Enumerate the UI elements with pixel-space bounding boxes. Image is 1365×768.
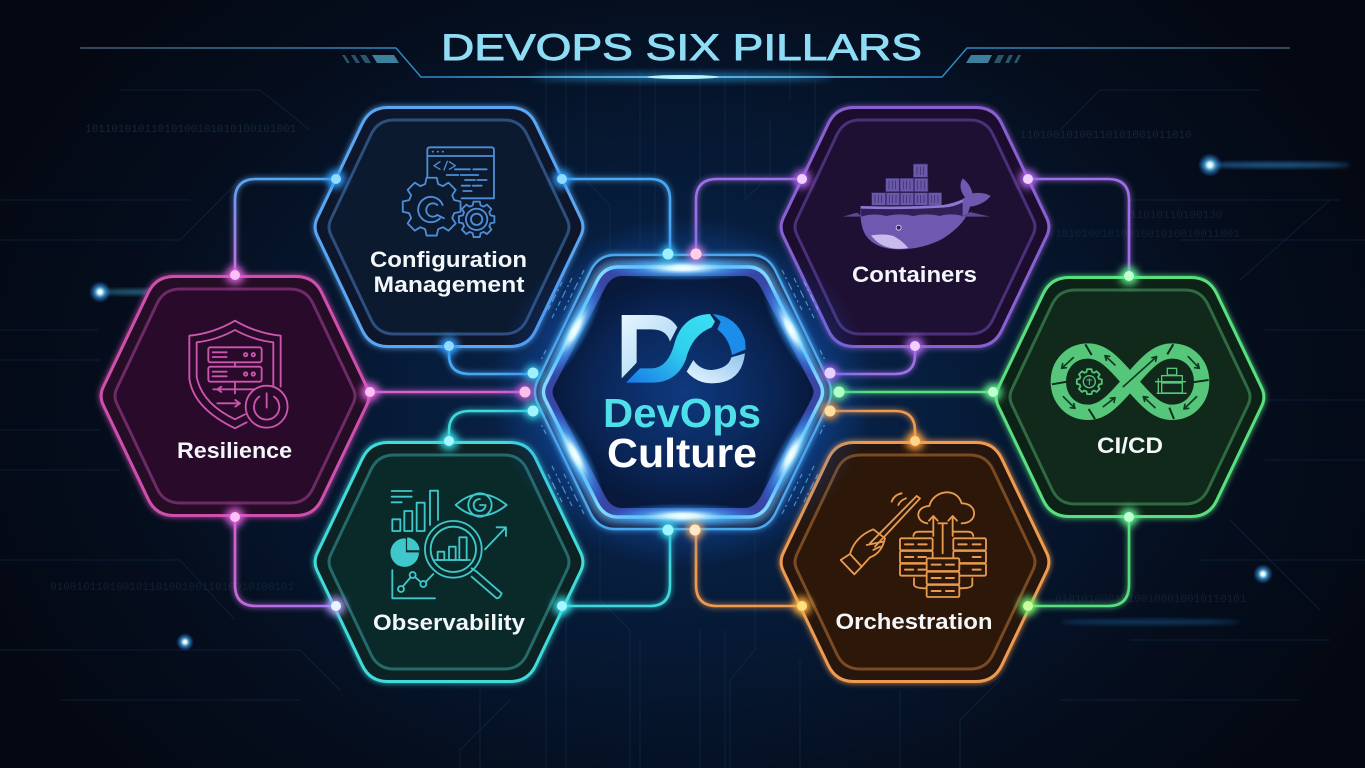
hexagon frame: Orchestration [781, 442, 1049, 682]
binary text right: 01010100010100100010010110101 [1055, 594, 1247, 606]
label: DevOps: DevOps [603, 390, 761, 436]
hexagon frame: Configuration Management [315, 108, 583, 346]
icon: DO logo [622, 314, 746, 383]
icon: code window and gears [403, 147, 494, 237]
label: Containers: Containers [852, 262, 977, 287]
binary text right: 11010110100130 [1130, 210, 1222, 222]
binary text left [50, 124, 297, 594]
title frame [80, 48, 1290, 80]
label: Observability: Observability [373, 610, 526, 635]
icon: conductor hand, cloud and servers [841, 492, 986, 597]
hexagon frame: Observability [315, 442, 583, 682]
icon: docker whale [843, 164, 991, 249]
panel: Resilience [101, 276, 369, 516]
center ambient glow [493, 217, 873, 567]
label: Configuration Management [370, 247, 527, 297]
binary text left: 0100101101001011010010011010010100101 [50, 582, 295, 594]
binary text left: 10110101011010100101010100101001 [85, 124, 297, 136]
binary text right: 11010010100110101001011010 [1020, 130, 1192, 142]
label: Orchestration: Orchestration [836, 609, 992, 634]
glowing background light points [89, 153, 1350, 651]
label: Configuration Management: Configuration [370, 247, 527, 272]
icon: shield with server and power [189, 321, 288, 428]
icon: analytics and magnifier [391, 491, 507, 598]
binary text right [1020, 130, 1247, 606]
center data streaks [540, 270, 826, 514]
title: DEVOPS SIX PILLARS [441, 27, 922, 68]
center hexagon light flares [537, 255, 829, 529]
label: Culture: Culture [607, 430, 757, 476]
connector nodes [226, 170, 1138, 615]
panel: Containers [781, 108, 1049, 346]
connector lines [235, 179, 1129, 606]
panel: DevOps Culture center [493, 217, 873, 567]
panel: Configuration Management [315, 108, 583, 346]
panel: CI/CD [996, 278, 1264, 516]
label: CI/CD: CI/CD [1097, 433, 1163, 458]
panel: Observability [315, 442, 583, 682]
center hexagon frame [535, 255, 831, 529]
hexagon frame: Containers [781, 108, 1049, 346]
icon: infinity loop [1052, 344, 1209, 419]
label: Resilience: Resilience [177, 438, 292, 463]
panel: Orchestration [781, 442, 1049, 682]
label: Configuration Management: Management [374, 272, 525, 297]
binary text right: 1010100101001001010010011001 [1055, 229, 1240, 241]
hexagon frame: CI/CD [996, 278, 1264, 516]
hexagon frame: Resilience [101, 276, 369, 516]
